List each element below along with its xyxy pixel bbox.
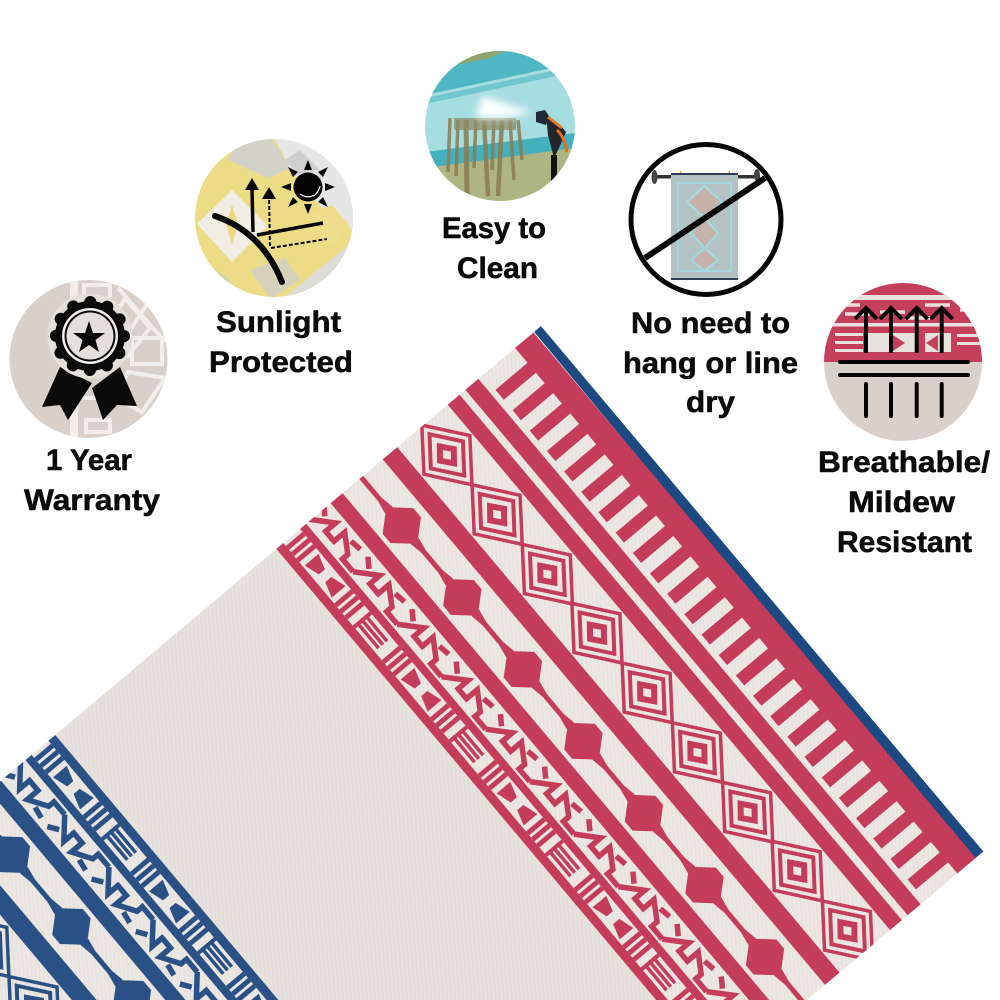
icon: award rosette [48, 294, 132, 378]
panel: rug photo [0, 326, 984, 1000]
panel: feature icons and labels [10, 51, 990, 552]
rug base cream [0, 330, 979, 1000]
icon: hosed rug photo [425, 51, 575, 201]
icon: sun [281, 160, 335, 214]
icon: light rays and surface [215, 178, 327, 282]
red pattern border [274, 330, 1000, 1000]
heading: Breathable Mildew Resistant: Resistant [837, 526, 972, 559]
panel: breathable mildew resistant [818, 283, 991, 559]
heading: Breathable Mildew Resistant: Breathable/ [818, 446, 991, 479]
heading: Breathable Mildew Resistant [818, 446, 991, 559]
panel: easy to clean [425, 51, 575, 285]
heading: Sunlight Protected: Sunlight [216, 306, 341, 339]
cream centre field [56, 550, 275, 734]
icon: hanging rug [671, 173, 738, 280]
heading: Breathable Mildew Resistant: Mildew [848, 486, 956, 519]
icon: hanging rod [652, 169, 760, 184]
blue pattern border [0, 735, 278, 1000]
icon: rug swatch background [195, 139, 355, 299]
woven texture [0, 326, 983, 1000]
heading: Sunlight Protected [209, 306, 353, 379]
heading: 1 Year Warranty: 1 Year [46, 444, 132, 477]
heading: Easy to Clean: Clean [457, 252, 538, 285]
heading: No need to hang or line dry: No need to [631, 307, 790, 340]
navy rug edge [530, 326, 983, 861]
icon: rug swatch background [824, 283, 984, 443]
heading: 1 Year Warranty [24, 444, 160, 517]
panel: 1 year warranty [9, 280, 169, 517]
icon: air flow arrows and layers [840, 308, 968, 416]
heading: Sunlight Protected: Protected [209, 346, 353, 379]
icon: award ribbons [42, 367, 137, 420]
icon: warranty background [9, 280, 169, 440]
icon: prohibition ring and slash [631, 144, 781, 294]
panel: sunlight protected [195, 139, 355, 379]
panel: no need to hang or line dry [623, 144, 798, 419]
heading: Easy to Clean: Easy to [442, 212, 546, 245]
heading: 1 Year Warranty: Warranty [24, 484, 160, 517]
heading: No need to hang or line dry: hang or line [623, 347, 798, 380]
heading: No need to hang or line dry: dry [686, 386, 735, 419]
heading: No need to hang or line dry [623, 307, 798, 419]
heading: Easy to Clean [442, 212, 546, 285]
